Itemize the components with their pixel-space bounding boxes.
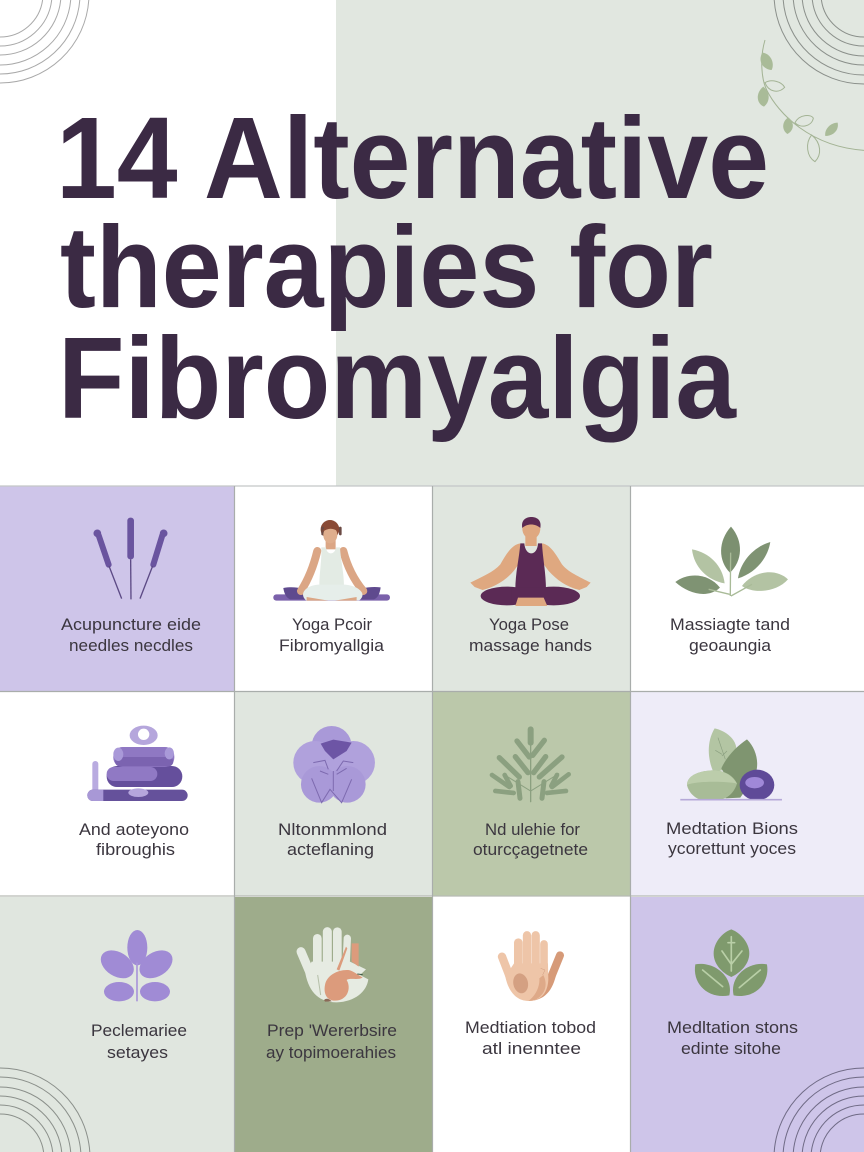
title: Fibromyalgia	[58, 313, 737, 443]
decoration: bottom-left arcs	[0, 1068, 90, 1152]
label: Nd ulehie for	[485, 821, 581, 839]
label	[79, 821, 189, 859]
decoration: bottom-right arcs	[774, 1068, 864, 1152]
panel: bowl and berry	[631, 692, 864, 896]
label	[473, 821, 588, 859]
panel: green leaf trio	[631, 897, 864, 1152]
label: acteflaning	[287, 841, 374, 859]
label: Peclemariee	[91, 1022, 187, 1040]
panel: yoga figure light	[235, 486, 432, 691]
label	[666, 820, 798, 858]
label: Acupuncture eide	[61, 616, 201, 634]
label	[61, 616, 201, 655]
label: Nltonmmlond	[278, 821, 387, 839]
label: Prep 'Wererbsire	[267, 1022, 397, 1040]
title	[56, 93, 769, 443]
label	[667, 1019, 798, 1058]
panel: purple flower	[235, 692, 432, 896]
label	[266, 1022, 397, 1062]
icon: leaves	[675, 527, 788, 596]
label: Medtiation tobod	[465, 1019, 596, 1037]
label: Massiagte tand	[670, 616, 790, 634]
label: needles necdles	[69, 637, 193, 655]
label: atl inenntee	[482, 1040, 581, 1058]
label: ycorettunt yoces	[668, 840, 796, 858]
panel: stacked cushions	[0, 692, 234, 896]
icon: yoga pose figure	[470, 517, 591, 606]
icon: leaf trio	[695, 929, 767, 996]
label	[469, 616, 592, 655]
panel: acupuncture	[0, 486, 234, 691]
label: And aoteyono	[79, 821, 189, 839]
icon: herb	[492, 729, 569, 802]
icon: stack	[87, 726, 188, 801]
label	[670, 616, 790, 655]
icon: massage hand	[301, 932, 368, 1002]
icon: needles	[93, 518, 167, 599]
panel: massage hand	[235, 897, 432, 1152]
panel: yoga pose	[433, 486, 630, 691]
grid lines	[0, 486, 864, 1152]
icon: open hand	[502, 935, 560, 1001]
label: ay topimoerahies	[266, 1044, 396, 1062]
label: geoaungia	[689, 637, 772, 655]
label	[465, 1019, 596, 1058]
label: fibroughis	[96, 841, 175, 859]
label: Yoga Pcoir	[292, 616, 373, 634]
title: therapies for	[60, 202, 713, 332]
icon: purple sprig	[96, 930, 178, 1001]
panel: open hand	[433, 897, 630, 1152]
label: oturcçagetnete	[473, 841, 588, 859]
label: edinte sitohe	[681, 1040, 781, 1058]
decoration: top-left arcs	[0, 0, 89, 83]
icon: seated yoga figure	[273, 520, 390, 601]
label: Fibromyallgia	[279, 637, 385, 655]
label: Yoga Pose	[489, 616, 569, 634]
header background	[0, 0, 864, 486]
label	[278, 821, 387, 859]
label: setayes	[107, 1044, 168, 1062]
label: Medtation Bions	[666, 820, 798, 838]
panel: herb sprig	[433, 692, 630, 896]
title: 14 Alternative	[56, 93, 769, 223]
icon: bowl, leaves and berry	[680, 728, 782, 800]
icon: vine	[758, 40, 864, 162]
icon: flower	[293, 726, 375, 803]
label	[279, 616, 385, 655]
label: Medltation stons	[667, 1019, 798, 1037]
panel: purple sprig	[0, 897, 234, 1152]
label: massage hands	[469, 637, 592, 655]
decoration: top-right arcs	[774, 0, 864, 84]
label	[91, 1022, 187, 1062]
panel: massage leaves	[631, 486, 864, 691]
